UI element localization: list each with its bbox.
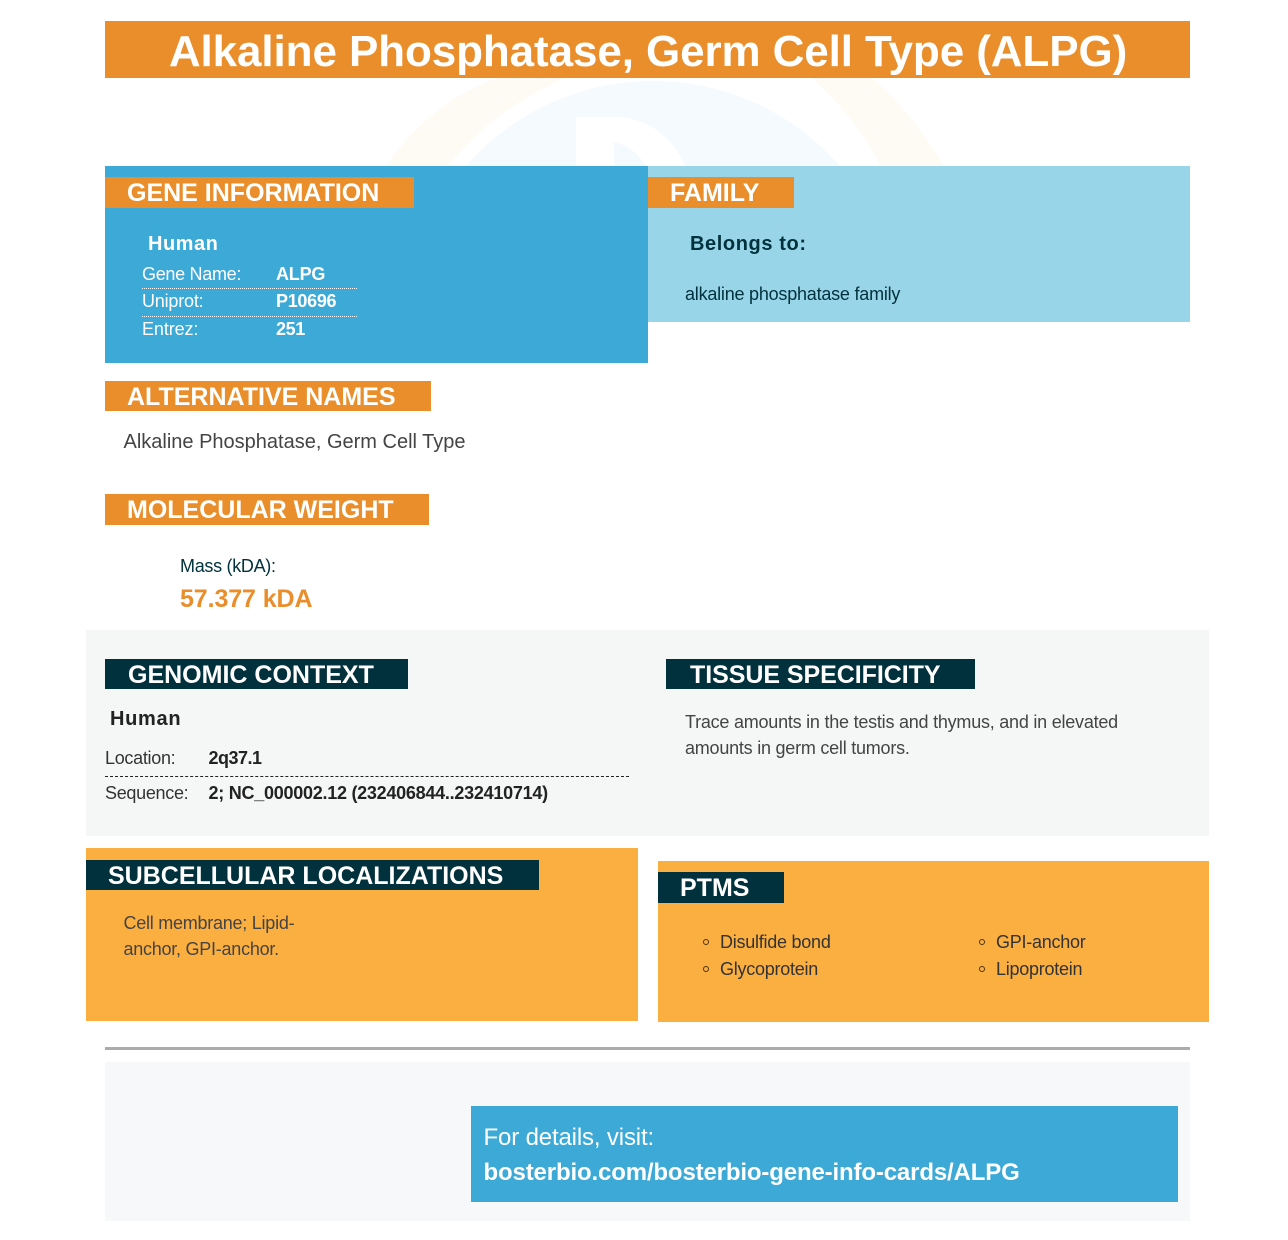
panel: genomic context and tissue specificity [86,630,1209,836]
heading: gene information: GENE INFORMATION [127,179,379,207]
tissue specificity text: Trace amounts in the testis and thymus, and in elevated [685,712,1118,732]
uniprot row: Uniprot: [142,291,203,311]
panel: subcellular localizations [86,848,638,1021]
gene name row: ALPG [276,264,325,284]
ptm list: left column [703,932,831,979]
sequence row: Sequence: [105,783,188,803]
link text: bosterbio.com/bosterbio-gene-info-cards/ALPG [484,1159,1020,1186]
entrez row: 251 [276,319,305,339]
panel: molecular weight [105,494,429,613]
heading: molecular weight: MOLECULAR WEIGHT [127,496,394,524]
gene name row [142,262,357,289]
panel: gene information [105,166,648,363]
heading: family: FAMILY [670,179,759,207]
background watermark logo [386,78,944,166]
entrez row: Entrez: [142,319,198,339]
uniprot row: P10696 [276,291,336,311]
family text: alkaline phosphatase family [685,284,900,304]
heading: alternative names: ALTERNATIVE NAMES [127,383,396,411]
panel: ptms [658,861,1209,1022]
ptm list: right column: Lipoprotein [996,959,1082,979]
localization text: Cell membrane; Lipid- [124,913,294,933]
panel: footer [105,1062,1190,1221]
species label: Human [110,708,181,730]
title banner: Alkaline Phosphatase, Germ Cell Type (ALPG) [169,27,1127,76]
ptm list: right column: GPI-anchor [996,932,1086,952]
location row: Location: [105,748,175,768]
alternative names text: Alkaline Phosphatase, Germ Cell Type [124,431,466,453]
ptm list: left column: Glycoprotein [720,959,818,979]
uniprot row [142,289,357,317]
heading: family [648,177,794,208]
heading: genomic context: GENOMIC CONTEXT [128,661,374,689]
location row [105,744,629,777]
sequence row: 2; NC_000002.12 (232406844..232410714) [208,783,548,803]
heading: tissue specificity: TISSUE SPECIFICITY [690,661,941,689]
ptm list: right column [979,932,1086,979]
mass label: Mass (kDA): [180,556,276,576]
panel: alternative names [105,381,466,453]
species label: Human [148,233,218,255]
visit label: For details, visit: [484,1124,654,1151]
heading: subcellular localizations: SUBCELLULAR LOCALIZATIONS [108,862,503,890]
heading: ptms [658,872,784,903]
mass value: 57.377 kDA [180,585,312,613]
ptm list: left column: Disulfide bond [720,932,831,952]
callout: details link [471,1106,1178,1202]
localization text [124,913,294,959]
gene name row: Gene Name: [142,264,241,284]
tissue specificity text: amounts in germ cell tumors. [685,738,910,758]
tissue specificity text [685,712,1118,758]
belongs to label: Belongs to: [690,233,807,255]
location row: 2q37.1 [208,748,262,768]
panel: family [648,166,1190,322]
localization text: anchor, GPI-anchor. [124,939,279,959]
entrez row [142,319,305,339]
heading: ptms: PTMS [680,874,749,902]
